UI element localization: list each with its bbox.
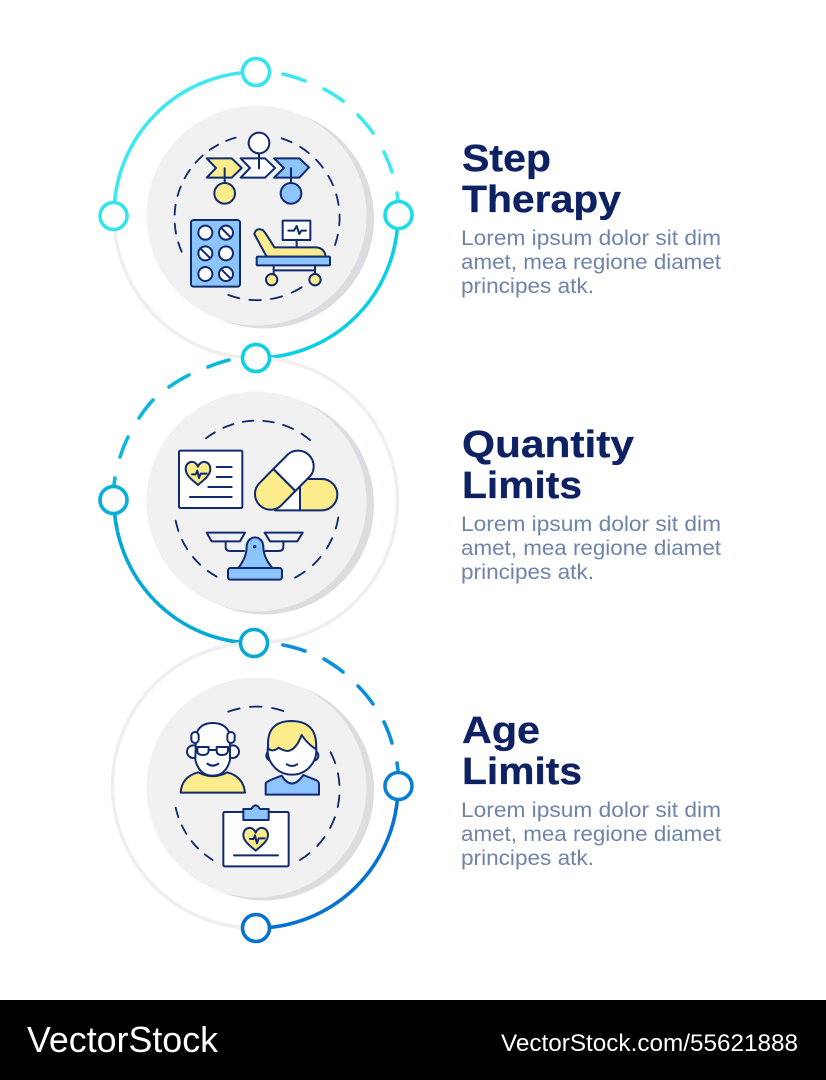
footer logo text: VectorStock xyxy=(27,1019,219,1060)
heading: step therapy: Therapy xyxy=(462,179,621,221)
icon: age limits xyxy=(176,707,340,866)
body text 2: Lorem ipsum dolor sit dim xyxy=(461,512,721,536)
icon: clipboard xyxy=(223,805,289,866)
body text 1: principes atk. xyxy=(461,274,594,298)
body text 2: principes atk. xyxy=(461,560,594,584)
disc shadow 3 xyxy=(154,680,374,900)
heading: quantity limits: Limits xyxy=(462,465,582,507)
body text 3: Lorem ipsum dolor sit dim xyxy=(461,798,721,822)
background ring arc 2 xyxy=(254,358,397,643)
disc shadow 2 xyxy=(154,394,374,614)
ring arc: solid blue xyxy=(114,500,254,643)
body text 1: amet, mea regione diamet xyxy=(461,250,721,274)
node top shared xyxy=(242,344,270,372)
chevrons xyxy=(207,133,309,204)
body text 3: principes atk. xyxy=(461,846,594,870)
disc 3 xyxy=(146,678,366,898)
icon: step therapy xyxy=(175,133,340,300)
body text 1: Lorem ipsum dolor sit dim xyxy=(461,226,721,250)
node right xyxy=(385,202,412,228)
heading: step therapy: Step xyxy=(462,138,551,180)
panel: age limits xyxy=(112,630,721,942)
heading: age limits: Age xyxy=(462,710,540,752)
footer bar xyxy=(0,1000,826,1080)
icon: hospital bed xyxy=(254,221,330,285)
ring arc: dashed blue xyxy=(114,360,229,485)
dashed circle xyxy=(176,421,338,578)
dashed circle xyxy=(176,707,340,860)
icon: blister pack xyxy=(191,220,240,287)
icon: old man xyxy=(181,723,245,793)
background ring arc 1 xyxy=(114,215,256,358)
disc shadow 1 xyxy=(154,108,374,328)
node top xyxy=(242,58,270,86)
icon: medical card xyxy=(179,451,242,508)
heading: age limits: Limits xyxy=(462,751,582,793)
ring arc: solid teal xyxy=(256,215,398,358)
node bottom xyxy=(242,914,270,942)
icon: young man xyxy=(266,721,319,795)
dashed circle xyxy=(175,138,340,300)
ring arc: dashed cyan xyxy=(283,74,398,200)
disc 1 xyxy=(146,106,366,326)
ring arc: solid cyan xyxy=(114,72,256,215)
heading: quantity limits: Quantity xyxy=(462,424,634,466)
panel: step therapy xyxy=(100,58,721,358)
icon: capsules xyxy=(255,451,337,510)
footer url text: VectorStock.com/55621888 xyxy=(501,1030,798,1057)
icon: quantity limits xyxy=(176,421,338,580)
body text 3: amet, mea regione diamet xyxy=(461,822,721,846)
node top shared xyxy=(240,630,268,656)
node right xyxy=(385,772,412,800)
body text 2: amet, mea regione diamet xyxy=(461,536,721,560)
panel: quantity limits xyxy=(100,344,721,643)
node left xyxy=(100,486,127,514)
ring arc: dashed deep blue xyxy=(283,645,398,770)
disc 2 xyxy=(146,392,366,612)
node left xyxy=(100,202,127,230)
icon: balance scale xyxy=(207,533,303,580)
ring arc: solid deep blue xyxy=(256,786,398,928)
background ring arc 3 xyxy=(112,643,256,928)
